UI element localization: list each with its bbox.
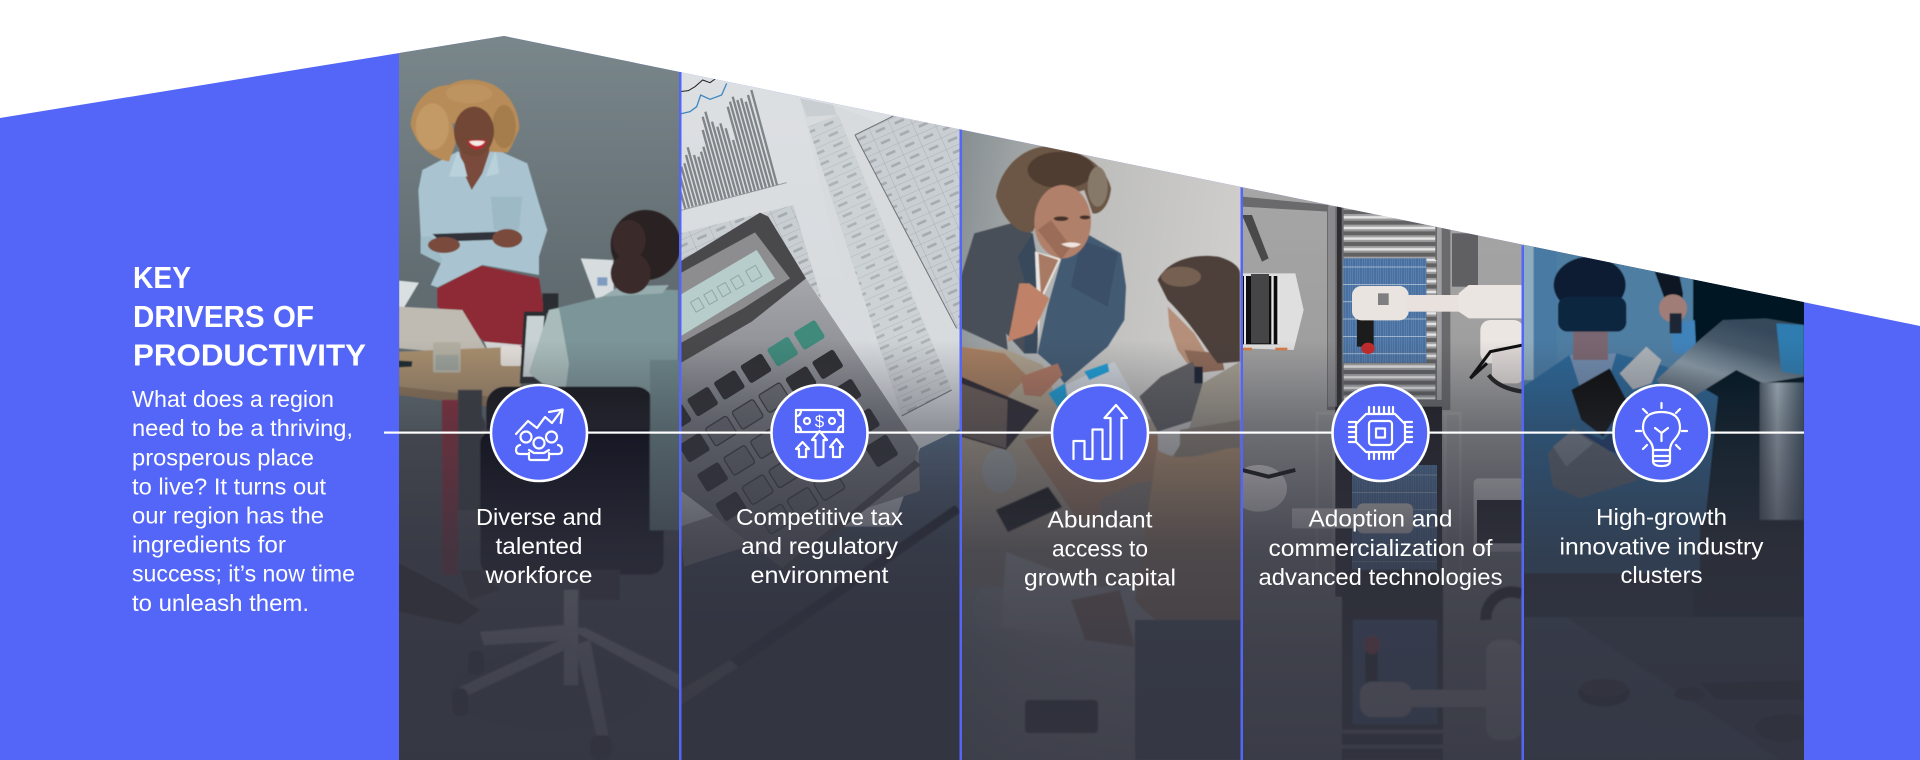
intro text block: to unleash them. — [132, 590, 309, 616]
intro text block — [132, 386, 355, 616]
label: diverse and talented workforce: workforce — [484, 562, 592, 588]
icon: microchip — [1332, 385, 1428, 481]
label: high-growth innovative industry clusters — [1560, 504, 1764, 588]
label: competitive tax and regulatory environment — [736, 504, 904, 588]
photo: engineer in VR headset with robotic arm — [1523, 240, 1815, 760]
label: diverse and talented workforce: Diverse and — [476, 504, 602, 530]
icon: workforce growth — [491, 385, 587, 481]
intro text block: need to be a thriving, — [132, 415, 353, 441]
bottom dark gradient overlay across photos — [399, 340, 1804, 760]
icon: money with up arrows: $ — [815, 412, 825, 431]
label: high-growth innovative industry clusters: clusters — [1620, 562, 1702, 588]
intro text block: ingredients for — [132, 532, 286, 558]
label: competitive tax and regulatory environment: Competitive tax — [736, 504, 904, 530]
intro text block: prosperous place — [132, 444, 314, 470]
timeline horizontal line — [384, 432, 1804, 434]
heading: key drivers of productivity: KEY — [133, 261, 191, 295]
label: abundant access to growth capital — [1024, 506, 1176, 590]
label: high-growth innovative industry clusters: High-growth — [1596, 504, 1727, 530]
label: competitive tax and regulatory environment: and regulatory — [741, 533, 899, 559]
label: high-growth innovative industry clusters: innovative industry — [1560, 534, 1764, 560]
label: diverse and talented workforce: talented — [496, 533, 582, 559]
icon: money with up arrows — [772, 385, 868, 481]
panel: photo columns — [399, 30, 1815, 760]
intro text block: to live? It turns out — [132, 474, 327, 500]
intro text block: success; it’s now time — [132, 560, 355, 586]
photo: business conversation across a table — [961, 120, 1242, 760]
label: abundant access to growth capital: Abundant — [1048, 506, 1153, 532]
label: adoption and commercialization of advanced technologies: advanced technologies — [1258, 564, 1502, 590]
intro text block: What does a region — [132, 386, 334, 412]
photo: woman presenting at meeting table — [399, 30, 681, 760]
icon: light bulb — [1614, 385, 1710, 481]
label: adoption and commercialization of advanced technologies: commercialization of — [1268, 535, 1493, 561]
label: adoption and commercialization of advanced technologies — [1258, 506, 1502, 590]
heading: key drivers of productivity — [133, 261, 366, 372]
label: abundant access to growth capital: growth capital — [1024, 564, 1176, 590]
heading: key drivers of productivity: DRIVERS OF — [133, 300, 314, 334]
label: adoption and commercialization of advanced technologies: Adoption and — [1308, 506, 1452, 532]
label: competitive tax and regulatory environment: environment — [750, 562, 889, 588]
intro text block: our region has the — [132, 502, 324, 528]
photo: calculator on financial papers — [660, 60, 961, 760]
column dividers — [679, 72, 1524, 760]
label: diverse and talented workforce — [476, 504, 602, 588]
heading: key drivers of productivity: PRODUCTIVITY — [133, 338, 366, 372]
icon: rising bars with arrow — [1052, 385, 1148, 481]
photo: overhead robot arm on production line — [1230, 180, 1524, 760]
label: abundant access to growth capital: access to — [1052, 536, 1148, 562]
